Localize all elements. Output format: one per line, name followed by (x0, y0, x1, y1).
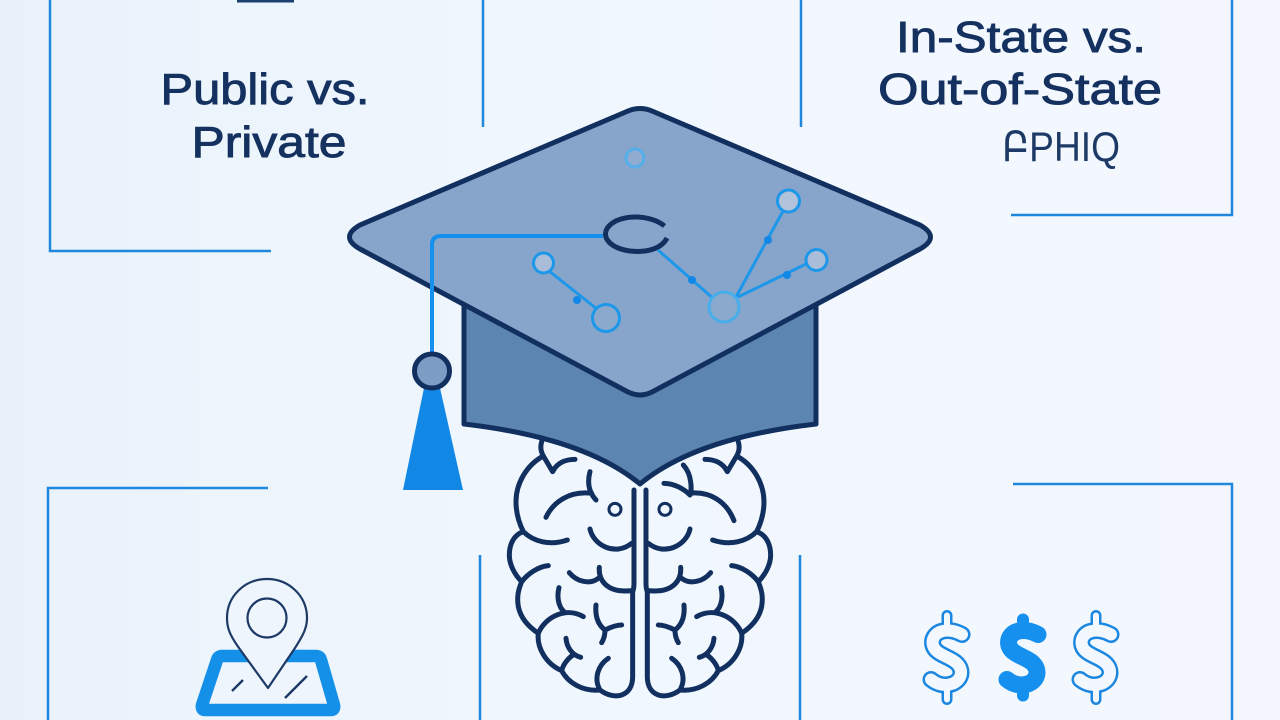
cap base (464, 300, 816, 484)
heading: Public vs. Private: Public vs. (160, 65, 370, 114)
panel: in-state vs out-of-state (top right) (801, 0, 1232, 215)
heading: In-State vs. Out-of-State: Out-of-State (878, 65, 1162, 114)
heading: In-State vs. Out-of-State: In-State vs. (896, 13, 1146, 62)
heading: Public vs. Private: Private (192, 118, 346, 167)
icon: three dollar signs (931, 616, 1111, 700)
tassel (403, 388, 463, 490)
panel: location (bottom left) (48, 488, 480, 720)
icon: outlined dollar sign, left (931, 616, 962, 700)
icon: map with location pin (202, 579, 334, 710)
tassel cord (432, 236, 603, 354)
panel: public vs private (top left) (50, 0, 483, 251)
button ring (606, 217, 667, 251)
panel: cost (bottom right) (800, 484, 1232, 720)
illegible caption: ԲPHIQ (1002, 123, 1120, 170)
network nodes (534, 149, 827, 332)
tassel knob (414, 354, 450, 388)
icon: graduation cap (350, 108, 930, 490)
cap board (350, 108, 930, 395)
icon: outlined dollar sign, right (1080, 616, 1111, 700)
icon: filled dollar sign, centre (1007, 620, 1038, 696)
icon: brain (509, 437, 771, 696)
icon fragment: cropped top edge (237, 0, 294, 2)
